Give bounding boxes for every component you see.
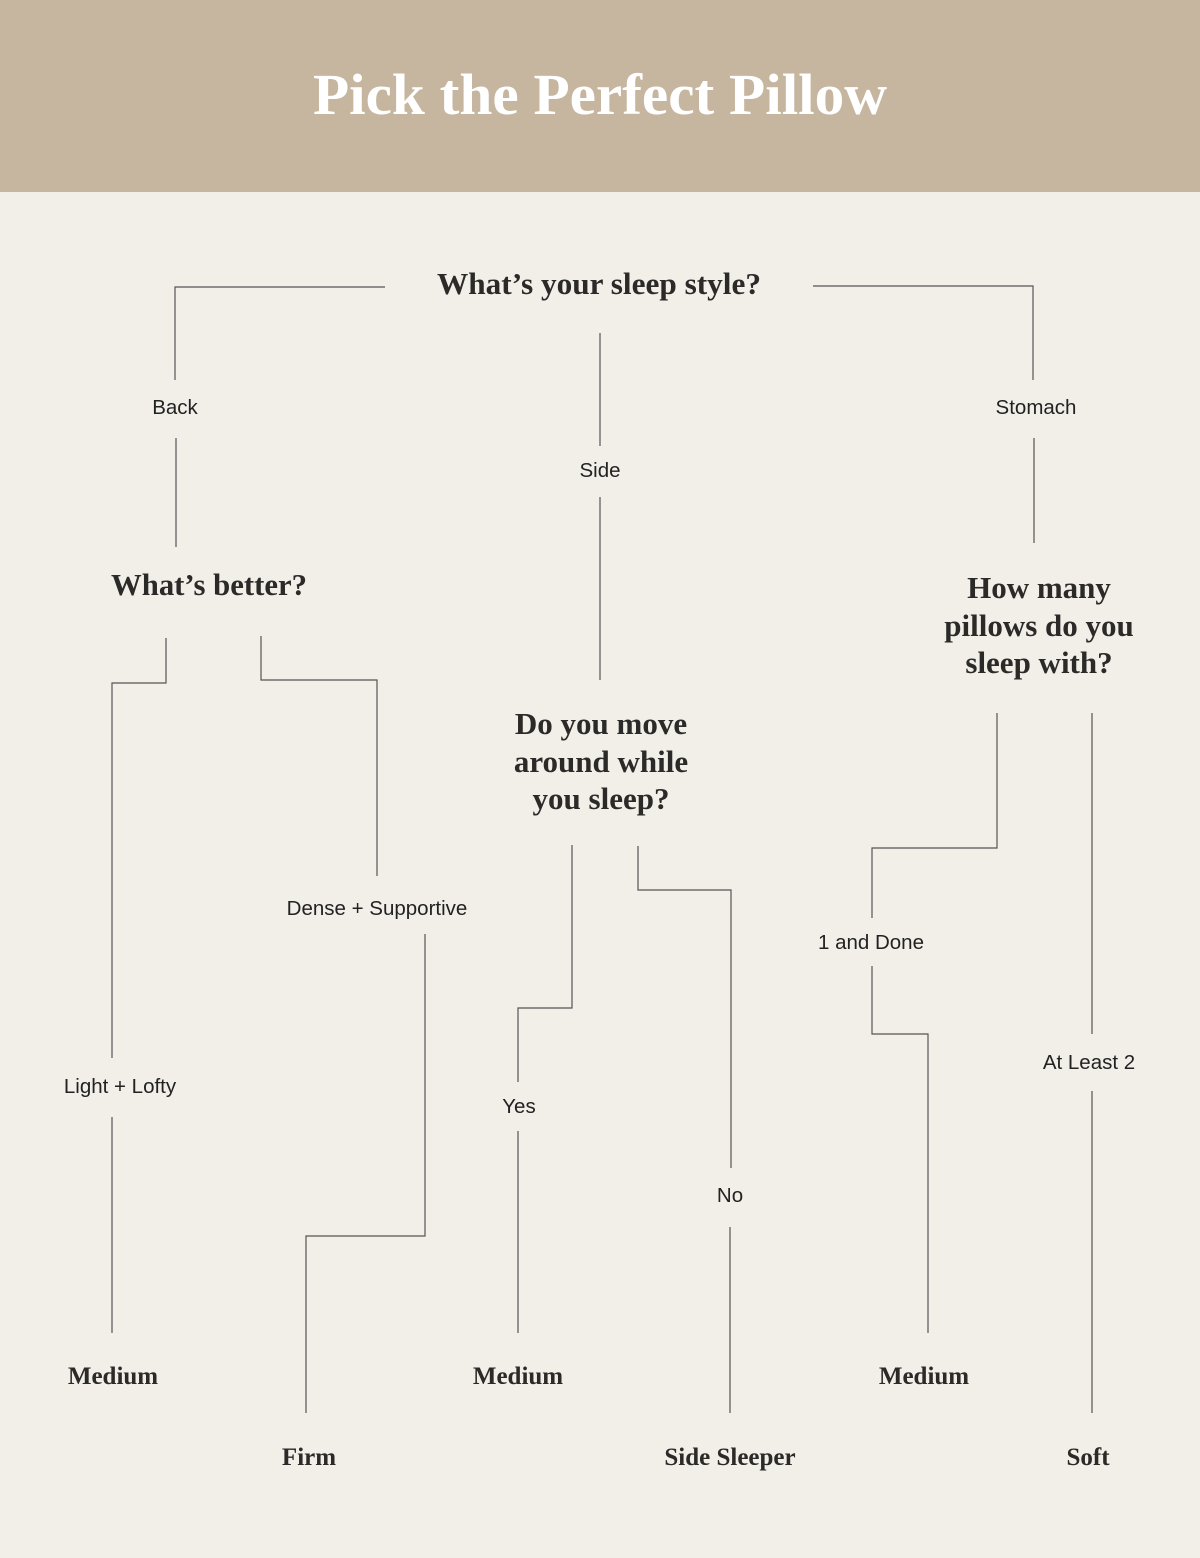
answer: Back: Back (152, 396, 199, 419)
question: how many pillows: pillows do you (944, 608, 1134, 643)
connectors back branch (112, 636, 425, 1413)
result: Medium (side): Medium (473, 1363, 563, 1390)
question: how many pillows (944, 570, 1134, 680)
answer: Light + Lofty: Light + Lofty (64, 1075, 177, 1098)
question: how many pillows: How many (967, 570, 1111, 605)
connectors stomach branch (872, 713, 1092, 1413)
connectors side branch (518, 845, 731, 1413)
question: what's better: What’s better? (111, 567, 307, 602)
answer: Yes: Yes (502, 1095, 536, 1118)
result: Medium (stomach): Medium (879, 1363, 969, 1390)
answer: At Least 2: At Least 2 (1043, 1051, 1135, 1074)
question: move around: Do you move (515, 706, 687, 741)
question: move around: around while (514, 744, 688, 779)
question: move around: you sleep? (533, 781, 669, 816)
result: Side Sleeper: Side Sleeper (664, 1444, 796, 1471)
answer: Side: Side (579, 459, 621, 482)
answer: 1 and Done: 1 and Done (818, 931, 924, 954)
answer: No: No (717, 1184, 743, 1207)
question: sleep style: What’s your sleep style? (437, 266, 761, 301)
question: move around (514, 706, 688, 816)
result: Medium (back): Medium (68, 1363, 158, 1390)
result: Firm: Firm (282, 1444, 336, 1471)
header banner (0, 0, 1200, 192)
title: Pick the Perfect Pillow (313, 62, 887, 127)
answer: Dense + Supportive: Dense + Supportive (287, 897, 467, 920)
answer: Stomach: Stomach (996, 396, 1076, 419)
connectors from sleep style (175, 286, 1034, 680)
result: Soft: Soft (1066, 1444, 1110, 1471)
question: how many pillows: sleep with? (965, 645, 1113, 680)
